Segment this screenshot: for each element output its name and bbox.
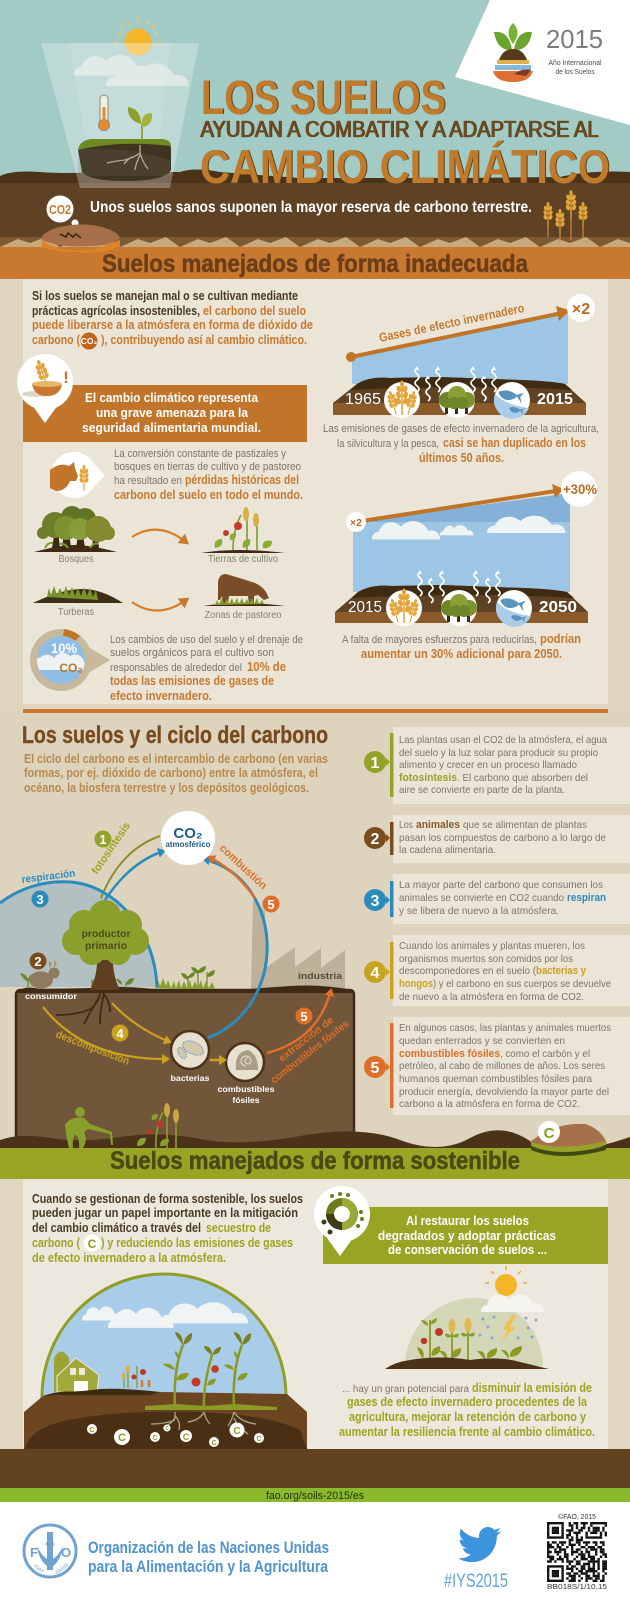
CO2 atmosphere node xyxy=(161,811,215,865)
label: grazing lands: Zonas de pastoreo xyxy=(204,610,282,621)
QR code xyxy=(547,1523,607,1581)
label: fuel extraction: combustibles fósiles xyxy=(268,1018,352,1086)
icon: wheat bowl pin xyxy=(17,354,73,423)
step 4 text: Cuando los animales y plantas mueren, los xyxy=(399,940,585,952)
glass xyxy=(41,43,199,188)
label: decomposition: descomposición xyxy=(54,1029,131,1068)
label: combustion: combustión xyxy=(217,842,269,892)
logo year: 2015 xyxy=(546,24,603,54)
factory xyxy=(251,900,345,990)
footer: FAO logo xyxy=(24,1525,76,1577)
text: emissions doubled xyxy=(323,423,599,465)
label: fuel extraction: extracción de xyxy=(276,1014,336,1064)
icon: rock with carbon: C xyxy=(544,1125,555,1142)
step 5 text: En algunos casos, las plantas y animales muertos xyxy=(399,1022,611,1034)
intro text: C xyxy=(88,1237,97,1251)
step 5 text: petróleo, al cabo de millones de años. Los seres xyxy=(399,1060,605,1072)
step 1 text: . El carbono que absorben del xyxy=(457,772,588,784)
intro text: Cuando se gestionan de forma sostenible, los suelos xyxy=(32,1192,303,1206)
steam xyxy=(415,366,496,401)
icon: fisheries xyxy=(496,590,532,627)
text: mitigation potential xyxy=(339,1381,595,1439)
lightning xyxy=(501,1315,516,1341)
step 1 text: alimento y crecer en un proceso llamado xyxy=(399,759,577,771)
step 1 text: Las plantas usan el CO2 de la atmósfera, el agua xyxy=(399,734,607,746)
text: land conversion xyxy=(114,448,303,502)
icon: cow and wheat bubble xyxy=(50,452,105,498)
label: fossil fuels xyxy=(218,1084,275,1105)
step 1 text: del suelo y la luz solar para producir su propio xyxy=(399,747,598,759)
grass xyxy=(155,978,215,989)
arrow: extraction xyxy=(267,990,331,1053)
link bar xyxy=(0,1488,630,1502)
callout: food security: El cambio climático representa xyxy=(85,390,259,405)
label: peatlands: Turberas xyxy=(58,607,94,618)
text: land use emissions: suelos orgánicos para el cultivo son xyxy=(110,647,274,659)
heading: soils and carbon cycle: Los suelos y el ciclo del carbono xyxy=(22,722,328,749)
icon: farmer xyxy=(65,1107,113,1148)
step 3 text: 3 xyxy=(371,893,380,910)
step 4 text: bacterias y xyxy=(536,965,587,977)
x2 badge: ×2 xyxy=(350,517,362,529)
plant leaves and fruit xyxy=(163,1332,251,1385)
footer: organization name: para la Alimentación y la Agricultura xyxy=(88,1558,329,1576)
step 2 text: pasan los compuestos de carbono a lo largo de xyxy=(399,832,606,844)
icon: 10% CO2 gauge: 10% xyxy=(51,640,78,656)
+30% badge: +30% xyxy=(563,481,598,497)
intro text: ) y reduciendo las emisiones de gases xyxy=(101,1236,293,1250)
year 1965: 1965 xyxy=(345,391,381,408)
icon: 10% CO2 gauge xyxy=(30,629,110,691)
arrow label: Gases de efecto invernadero xyxy=(378,301,526,345)
step 1 text: 1 xyxy=(371,755,380,772)
step 1 badge xyxy=(94,830,112,848)
bacteria node xyxy=(171,1031,209,1069)
text: land conversion: ha resultado en xyxy=(114,475,182,487)
text: land use emissions xyxy=(110,634,303,703)
clouds xyxy=(372,516,565,540)
carbon particles xyxy=(87,1422,264,1447)
copyright: ©FAO, 2015 xyxy=(558,1513,596,1521)
label: industry: industria xyxy=(298,971,343,981)
step 3 text: animales se convierte en CO2 cuando xyxy=(399,892,564,904)
chart: emissions 2015-2050 xyxy=(335,471,598,627)
footer: organization name xyxy=(88,1539,329,1576)
text: mitigation potential: aumentar la resiliencia frente al cambio climático. xyxy=(339,1425,595,1439)
label: bacteria: bacterias xyxy=(170,1073,210,1083)
step 4 badge: 4 xyxy=(116,1026,124,1041)
icon: soil ring pin xyxy=(314,1186,370,1256)
intro text xyxy=(32,1192,303,1265)
logo caption: de los Suelos xyxy=(556,67,595,76)
tree: primary producer: primario xyxy=(85,941,127,952)
intro text: puede liberarse a la atmósfera en forma de dióxido de xyxy=(32,318,313,332)
step 4 text xyxy=(364,935,630,1006)
text: land use emissions: Los cambios de uso del suelo y el drenaje de xyxy=(110,634,303,646)
label: fossil fuels: combustibles xyxy=(218,1084,275,1094)
icon: fisheries xyxy=(494,382,530,419)
arrow: forests to cropland xyxy=(132,530,186,542)
step 5 text: combustibles fósiles xyxy=(399,1048,500,1060)
step 2 text: la cadena alimentaria. xyxy=(399,844,496,856)
callout: restoring soils xyxy=(314,1186,608,1264)
text: land use emissions: responsables de alrededor del xyxy=(110,662,242,674)
tomatoes xyxy=(192,1365,219,1386)
cloud xyxy=(481,1294,544,1312)
small crops xyxy=(122,1365,149,1388)
text: 30% more by 2050: A falta de mayores esfuerzos para reducirlas, xyxy=(342,634,537,646)
icon: soil rock xyxy=(42,224,120,253)
arrow: respiration arc xyxy=(0,882,157,987)
label: cropland: Tierras de cultivo xyxy=(208,554,278,565)
text: land use emissions: todas las emisiones de gases de xyxy=(110,674,274,688)
intro text: prácticas agrícolas insostenibles, xyxy=(32,304,200,318)
background hills xyxy=(0,170,630,183)
text: emissions doubled: casi se han duplicado en los xyxy=(443,436,586,450)
icon: peatland xyxy=(33,586,123,603)
arrow: respiration to atmosphere xyxy=(105,851,164,900)
brown ground band xyxy=(0,183,630,237)
step 2 badge xyxy=(30,952,46,970)
subtitle: Unos suelos sanos suponen la mayor reserva de carbono terrestre. xyxy=(90,199,532,216)
step 4 text: descomponedores en el suelo ( xyxy=(399,965,536,977)
logo caption xyxy=(548,58,602,76)
icon: CO2 bubble: CO2 xyxy=(49,203,71,217)
sun xyxy=(485,1266,527,1296)
step 5 text: humanos queman combustibles fósiles para xyxy=(399,1073,592,1085)
text: 30% more by 2050: aumentar un 30% adicional para 2050. xyxy=(361,647,562,661)
carbon particles: C xyxy=(211,1440,217,1447)
step 2 text: 2 xyxy=(371,831,380,848)
icon: cropland xyxy=(201,507,285,553)
title xyxy=(200,72,610,193)
heading: poorly managed soils: Suelos manejados de forma inadecuada xyxy=(102,250,529,278)
text: mitigation potential: gases de efecto invernadero procedentes de la xyxy=(347,1395,588,1409)
icon: agriculture xyxy=(384,380,420,418)
step 5 text: producir energía, devolviendo la mayor parte del xyxy=(399,1086,609,1098)
respiration dome xyxy=(0,882,157,987)
step 3 text: La mayor parte del carbono que consumen los xyxy=(399,879,603,891)
intro text: Si los suelos se manejan mal o se cultivan mediante xyxy=(32,289,298,303)
carbon particles: C xyxy=(165,1426,169,1432)
roots xyxy=(151,1412,256,1434)
step 2 badge: 2 xyxy=(34,954,42,969)
step 5 text: 5 xyxy=(371,1060,380,1077)
green section band xyxy=(0,1148,630,1179)
illustration: sustainable farm dome xyxy=(24,1274,307,1449)
intro text: CO₂ xyxy=(81,336,97,346)
clouds xyxy=(74,55,188,86)
text: land conversion: La conversión constante de pastizales y xyxy=(114,448,286,460)
icon: forestry xyxy=(441,590,477,626)
clouds xyxy=(82,1302,248,1328)
step 4 text: hongos xyxy=(399,978,433,990)
logo caption: Año Internacional xyxy=(548,58,602,67)
text: carbon cycle definition: El ciclo del carbono es el intercambio de carbono (en varias xyxy=(24,752,328,766)
footer: FAO logo: FIAT xyxy=(33,1564,45,1575)
text: land conversion: pérdidas históricas del xyxy=(185,473,299,487)
heading: sustainably managed soils: Suelos manejados de forma sostenible xyxy=(110,1147,520,1175)
footer: FAO logo: O xyxy=(61,1545,71,1560)
panel: carbon cycle background xyxy=(0,713,630,1149)
step 4 badge xyxy=(112,1024,128,1042)
illustration: resilient farm xyxy=(385,1266,549,1369)
dome xyxy=(405,1298,543,1366)
CO2 atmosphere node: atmosférico xyxy=(166,839,210,849)
callout: food security: una grave amenaza para la xyxy=(96,405,249,420)
roots xyxy=(56,991,110,1024)
step 3 text xyxy=(364,874,630,924)
sky dome xyxy=(42,1274,286,1397)
arrow: decomposers to atmosphere xyxy=(204,859,267,1038)
icon: agriculture xyxy=(386,588,422,626)
text: 30% more by 2050 xyxy=(342,632,581,661)
callout: restoring soils: degradados y adoptar prácticas xyxy=(378,1228,556,1243)
publication code: BB018S/1/10.15 xyxy=(547,1584,607,1591)
carbon particles: C xyxy=(89,1427,95,1434)
footer: FAO logo: F xyxy=(30,1545,38,1560)
step 1 badge: 1 xyxy=(99,832,107,847)
step 2 text xyxy=(364,815,630,863)
text: 30% more by 2050: podrían xyxy=(540,632,581,646)
text: carbon cycle definition xyxy=(24,752,328,795)
soil block xyxy=(24,1389,307,1449)
arrow: decomposition lower xyxy=(43,1007,168,1059)
carbon particles: C xyxy=(118,1432,126,1444)
footer: FAO logo: PANIS xyxy=(55,1562,70,1576)
header sky background xyxy=(0,0,630,190)
soil strip xyxy=(333,377,586,415)
step 1 text xyxy=(364,727,630,804)
step 5 badge: extraction: 5 xyxy=(300,1009,308,1024)
step 5 text: , como el carbón y el xyxy=(500,1048,590,1060)
fossil node xyxy=(226,1043,264,1081)
hashtag: #IYS2015 xyxy=(444,1571,508,1592)
plant leaves xyxy=(20,966,215,985)
chart: emissions 1965-2015 xyxy=(333,294,595,419)
icon: rock with carbon xyxy=(530,1121,607,1156)
year 2050: 2050 xyxy=(539,599,577,616)
x2 badge xyxy=(346,512,366,532)
step 3 text: y se libera de nuevo a la atmósfera. xyxy=(399,905,559,917)
step 5 badge: extraction xyxy=(296,1008,312,1024)
arrow: peatland to grazing xyxy=(132,600,186,611)
icon: wheat bowl pin: ! xyxy=(63,368,69,387)
text: land conversion: carbono del suelo en todo el mundo. xyxy=(114,488,303,502)
icon: wheat plants xyxy=(543,190,588,243)
sun xyxy=(114,18,162,56)
x2 badge xyxy=(567,294,595,322)
text: carbon cycle definition: formas, por ej. dióxido de carbono) entre la atmósfera, el xyxy=(24,766,318,780)
year 2015: 2015 xyxy=(348,599,382,616)
surface soil xyxy=(16,986,354,993)
callout: restoring soils: de conservación de suelos ... xyxy=(388,1242,547,1257)
thermometer xyxy=(98,95,110,130)
icon: forest xyxy=(34,506,117,552)
text: mitigation potential: agricultura, mejorar la retención de carbono y xyxy=(349,1410,586,1424)
step 4 text: organismos muertos son comidos por los xyxy=(399,953,573,965)
callout: restoring soils: Al restaurar los suelos xyxy=(406,1213,529,1228)
tree: primary producer: productor xyxy=(82,929,131,940)
barn and silo xyxy=(54,1352,99,1392)
crops xyxy=(417,1318,522,1362)
label: forests: Bosques xyxy=(58,554,94,565)
step 5 badge: combustion: 5 xyxy=(267,897,275,912)
step 3 text: respiran xyxy=(567,892,606,904)
icon: CO2 bubble xyxy=(46,196,78,234)
step 5 text: quedan enterrados y se convierten en xyxy=(399,1035,565,1047)
step 5 text xyxy=(364,1017,630,1115)
icon: rabbit xyxy=(29,960,60,988)
x2 badge: ×2 xyxy=(572,301,590,318)
intro text: de efecto invernadero a la atmósfera. xyxy=(32,1251,226,1265)
icon: 10% CO2 gauge: CO₂ xyxy=(59,661,83,675)
step 2 text: Los xyxy=(399,819,413,831)
intro text: carbono ( xyxy=(32,1236,81,1250)
label: respiration: respiración xyxy=(21,867,76,886)
soil xyxy=(385,1358,549,1369)
soil strip xyxy=(335,585,588,623)
trend arrow xyxy=(346,306,570,362)
underground block xyxy=(16,990,354,1148)
arrow: photosynthesis xyxy=(101,836,160,898)
callout: food security xyxy=(17,354,307,442)
panel: sustainably managed soils xyxy=(0,1179,630,1449)
intro text: carbono ( xyxy=(32,333,81,347)
step 2 text: que se alimentan de plantas xyxy=(463,819,587,831)
grass line xyxy=(145,1404,277,1410)
chart: carbon cycle diagram xyxy=(0,811,354,1148)
step 1 text: fotosíntesis xyxy=(399,772,457,784)
text: land conversion: bosques en tierras de cultivo y de pastoreo xyxy=(114,461,301,473)
icon: crop plants xyxy=(137,1103,179,1148)
link bar: fao.org/soils-2015/es xyxy=(266,1490,364,1502)
intro text: el carbono del suelo xyxy=(203,304,306,318)
+30% badge xyxy=(561,471,598,507)
step 2 text: animales xyxy=(416,819,460,831)
logo: International Year of Soils 2015 xyxy=(493,23,603,82)
orange section band xyxy=(0,247,630,279)
strata pattern xyxy=(0,237,630,247)
panel: poorly managed soils xyxy=(0,279,630,713)
white logo corner xyxy=(455,0,630,125)
icon: twitter bird xyxy=(458,1527,501,1562)
brown base band xyxy=(0,1449,630,1488)
text: carbon cycle definition: océano, la biosfera terrestre y los depósitos geológicos. xyxy=(24,781,309,795)
title: LOS SUELOS xyxy=(201,72,446,125)
step 1 text: aire se convierte en parte de la planta. xyxy=(399,784,565,796)
text: mitigation potential: disminuir la emisión de xyxy=(472,1381,592,1395)
intro text: ), contribuyendo así al cambio climático. xyxy=(101,333,307,347)
sky wedge xyxy=(353,493,570,523)
carbon particles: C xyxy=(152,1435,158,1442)
text: land use emissions: efecto invernadero. xyxy=(110,689,212,703)
step 4 text: ) y el carbono en sus cuerpos se devuelve xyxy=(433,978,611,990)
rain xyxy=(478,1316,538,1340)
step 3 badge: 3 xyxy=(36,892,44,907)
carbon particles: C xyxy=(183,1432,190,1442)
tree: primary producer xyxy=(62,900,149,990)
sprout xyxy=(128,107,152,140)
logo emblem xyxy=(493,23,533,82)
text: emissions doubled: Las emisiones de gases de efecto invernadero de la agricultura, xyxy=(323,423,599,435)
bottom soil line xyxy=(0,1130,630,1150)
plant cluster xyxy=(28,970,207,988)
text: land use emissions: 10% de xyxy=(247,660,286,674)
trend arrow xyxy=(362,484,564,521)
step 4 text: de nuevo a la atmósfera en forma de CO2. xyxy=(399,991,584,1003)
intro text: pueden jugar un papel importante en la mitigación xyxy=(32,1206,298,1220)
intro text: del cambio climático a través del xyxy=(32,1221,201,1235)
footer: organization name: Organización de las Naciones Unidas xyxy=(88,1539,329,1557)
soil xyxy=(78,139,171,181)
text: mitigation potential: ... hay un gran potencial para xyxy=(342,1383,469,1395)
carbon particles: C xyxy=(256,1436,262,1443)
arrow: combustion xyxy=(209,857,255,898)
step 5 text: carbono a la atmósfera en forma de CO2. xyxy=(399,1098,580,1110)
arrow: decomposition upper xyxy=(112,1003,170,1042)
step 5 badge: combustion xyxy=(262,896,280,912)
intro text: secuestro de xyxy=(206,1221,271,1235)
sky wedge xyxy=(352,313,568,384)
label: photosynthesis: fotosíntesis xyxy=(90,820,133,877)
step 3 badge xyxy=(32,890,48,908)
text: emissions doubled: últimos 50 años. xyxy=(419,451,504,465)
carbon particles: C xyxy=(233,1426,241,1437)
text: emissions doubled: la silvicultura y la pesca, xyxy=(337,438,439,450)
arrow: bacteria to fossil xyxy=(210,1059,225,1061)
intro text xyxy=(32,289,313,350)
CO2 atmosphere node: CO₂ xyxy=(173,825,203,842)
label: fossil fuels: fósiles xyxy=(232,1095,260,1105)
growing plants xyxy=(175,1345,242,1408)
step 4 text: 4 xyxy=(371,965,380,982)
icon: glass greenhouse with plant xyxy=(41,18,199,188)
icon: forestry xyxy=(439,382,475,418)
label: consumer: consumidor xyxy=(25,991,78,1001)
callout: food security: seguridad alimentaria mundial. xyxy=(82,420,261,435)
footer: FAO logo: A xyxy=(45,1533,55,1548)
icon: grazing cow xyxy=(203,574,285,606)
steam xyxy=(418,570,500,603)
year 2015: 2015 xyxy=(537,391,573,408)
